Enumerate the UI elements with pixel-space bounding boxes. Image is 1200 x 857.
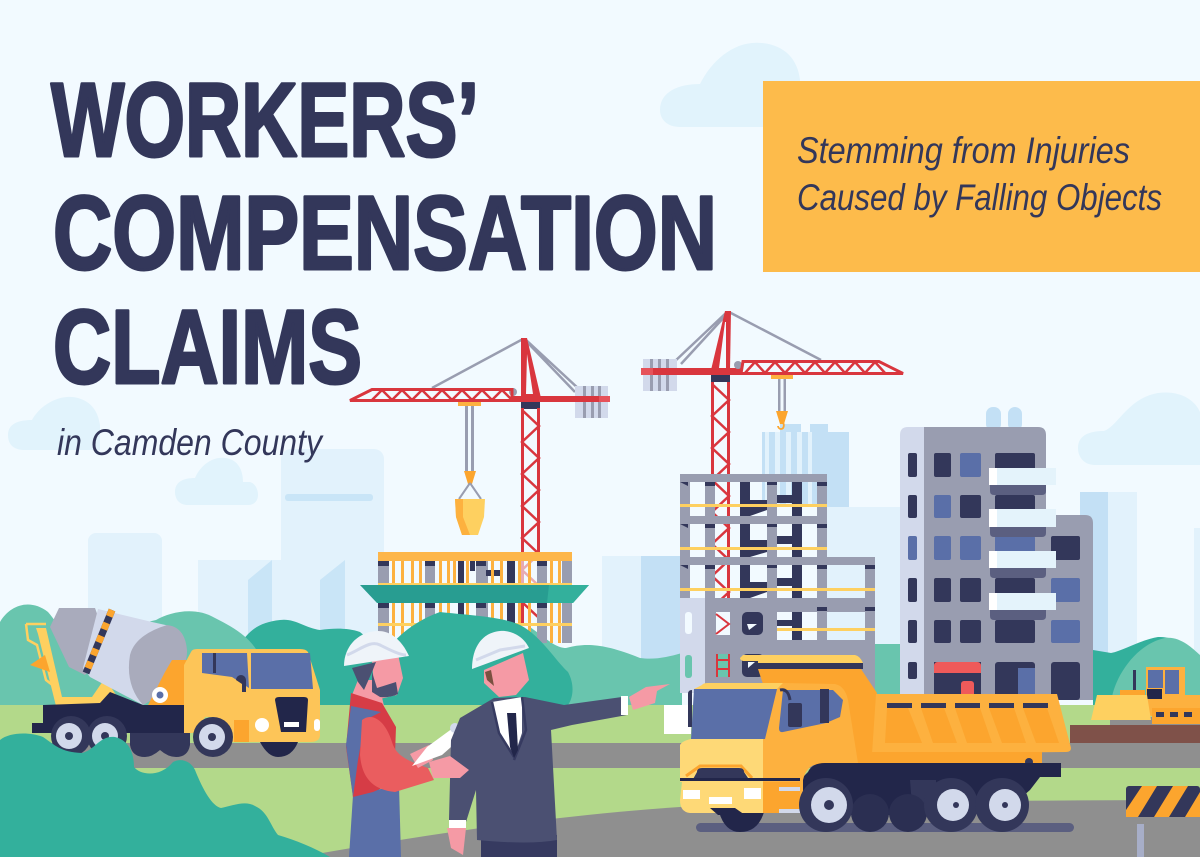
bulldozer (1091, 667, 1200, 725)
chassis (800, 763, 1061, 803)
cab (184, 649, 320, 742)
crane: right tower (641, 311, 903, 690)
grille and bumper (680, 782, 800, 813)
background city skyline (88, 407, 1200, 666)
head (372, 654, 403, 700)
vest (346, 693, 396, 797)
title: COMPENSATION (53, 175, 717, 292)
clipboard (412, 728, 468, 766)
crane: left tower (350, 338, 610, 625)
building under construction: left scaffolded (360, 552, 589, 643)
bush behind the engineers (380, 612, 573, 705)
title: WORKERS’ (51, 62, 479, 179)
dual wheels (130, 733, 190, 757)
hills (0, 605, 1200, 705)
paper note by hand (664, 705, 691, 734)
hidden wheels (851, 794, 889, 832)
callout text: Stemming from Injuries (797, 130, 1130, 171)
dump truck (680, 655, 1074, 832)
pointing hand (629, 684, 670, 710)
neck (352, 680, 384, 706)
arm (360, 717, 434, 792)
subtitle: in Camden County (57, 422, 324, 463)
chassis (32, 692, 190, 733)
worker with clipboard (344, 631, 468, 857)
clouds (8, 43, 1200, 505)
jacket (449, 697, 627, 842)
engineer in suit (429, 631, 670, 857)
hand (410, 745, 433, 768)
cab guard (758, 669, 877, 765)
trousers (349, 785, 401, 857)
shirt (492, 697, 522, 757)
orange callout box (763, 81, 1200, 272)
hard hat (344, 631, 409, 666)
balconies (989, 468, 1056, 620)
cuff and hand (449, 820, 466, 828)
mixer drum (50, 608, 110, 675)
support (148, 660, 187, 705)
hard hat (472, 631, 529, 669)
foreground bush (0, 734, 330, 857)
dump bed (872, 694, 1071, 754)
callout text (797, 130, 1162, 218)
truck arm (36, 628, 118, 706)
holding hand (429, 756, 469, 778)
building under construction: grey frame (680, 474, 875, 700)
road barrier (1126, 786, 1200, 857)
tie (507, 713, 518, 758)
cab body (763, 683, 858, 812)
wheels (260, 742, 298, 757)
cement mixer truck (26, 608, 320, 757)
title: CLAIMS (53, 289, 362, 406)
wheels (799, 778, 1029, 832)
windows (908, 453, 1080, 700)
concrete bucket (455, 499, 485, 535)
ground and roads (0, 705, 1200, 857)
head (484, 653, 529, 697)
title (51, 62, 717, 406)
grey apartment block (900, 427, 1093, 700)
